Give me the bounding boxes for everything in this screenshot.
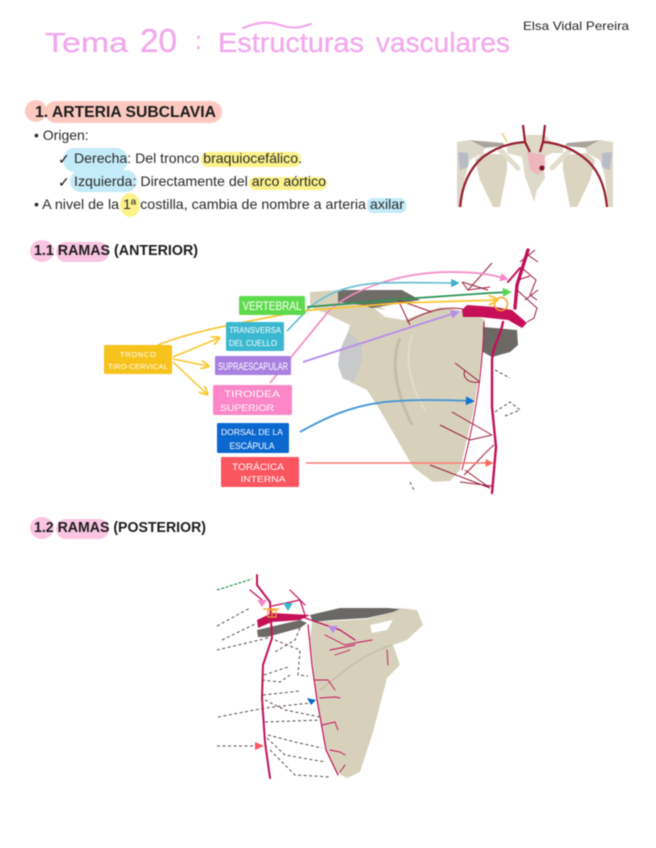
title: : xyxy=(195,28,202,55)
arteries xyxy=(398,250,538,493)
bullet: a nivel de la primera costilla xyxy=(34,193,406,217)
arrow: tronco to supraescapular xyxy=(173,359,208,366)
label: transversa del cuello xyxy=(226,322,284,351)
scapular notch xyxy=(370,620,393,633)
marker: pink xyxy=(257,600,267,607)
label: supraescapular xyxy=(215,356,291,375)
arrow: tronco to transversa xyxy=(173,338,219,357)
label: vertebral xyxy=(239,296,305,315)
label: vertebral: VERTEBRAL xyxy=(242,299,302,313)
title: vasculares xyxy=(376,27,510,58)
section 1 text xyxy=(25,100,406,217)
glenoid xyxy=(338,332,362,382)
bullet: a nivel de la primera costilla: • A nivel de la 1ª costilla, cambia de nombre a arteria axilar xyxy=(34,196,404,212)
main arteries xyxy=(257,575,272,778)
heading: arteria subclavia: 1. ARTERIA SUBCLAVIA xyxy=(35,104,216,121)
subclavian trunk xyxy=(257,613,310,628)
arrow: tiroidea superior xyxy=(270,272,507,383)
heading: arteria subclavia xyxy=(25,100,222,123)
heading: ramas anterior: 1.1 RAMAS (ANTERIOR) xyxy=(34,243,198,259)
scapula body xyxy=(310,608,423,778)
label: toracica interna: TORÁCICA xyxy=(232,462,285,473)
dashed rib vessels xyxy=(262,667,330,777)
subclavian trunk xyxy=(462,305,527,328)
title: Tema xyxy=(45,27,129,58)
label: tiroidea superior xyxy=(213,385,292,415)
right shoulder girdle xyxy=(552,140,613,207)
arrow: tronco to tiroidea xyxy=(173,362,207,394)
author name: Elsa Vidal Pereira xyxy=(523,19,629,33)
scapular branches xyxy=(315,635,388,772)
label: supraescapular: SUPRAESCAPULAR xyxy=(218,361,288,373)
label: toracica interna xyxy=(221,457,299,487)
title: 20 xyxy=(140,22,177,59)
marker: orange box xyxy=(263,609,279,617)
illustration: posterior scapula xyxy=(217,575,423,778)
title xyxy=(45,22,510,59)
heading: ramas posterior xyxy=(30,517,206,539)
item: izquierda: ✓ xyxy=(58,174,70,190)
heading: ramas posterior: 1.2 RAMAS (POSTERIOR) xyxy=(34,520,206,536)
marker: purple xyxy=(328,626,338,633)
arrow: vertebral xyxy=(307,292,510,307)
label: tiroidea superior: SUPERIOR xyxy=(220,403,275,413)
arrow: dorsal de la escapula xyxy=(300,400,473,432)
arrow: transversa del cuello xyxy=(287,283,458,331)
item: derecha: ✓ xyxy=(58,151,70,167)
item: derecha xyxy=(58,148,302,172)
item: derecha: Derecha: Del tronco braquiocefálico. xyxy=(74,150,302,166)
label: tronco tiro-cervical xyxy=(104,345,172,374)
arrow: toracica interna xyxy=(306,462,492,464)
spine and sternum xyxy=(507,135,563,202)
label: transversa del cuello: DEL CUELLO xyxy=(229,339,277,348)
scapula body xyxy=(310,290,485,482)
clavicle xyxy=(310,608,400,622)
label: tiroidea superior: TIROIDEA xyxy=(224,389,280,399)
marker: blue xyxy=(307,698,316,705)
title: Estructuras xyxy=(218,27,364,58)
rib segment xyxy=(257,620,307,637)
arteries xyxy=(460,125,525,207)
label: dorsal de la escapula xyxy=(217,423,289,453)
branch arrows xyxy=(158,272,510,463)
rib segment xyxy=(483,327,518,357)
marker: teal xyxy=(283,603,293,611)
white notch xyxy=(374,308,404,320)
label: tronco tiro-cervical: TRONCO xyxy=(120,350,156,359)
arrow: supraescapular xyxy=(303,312,458,362)
clavicle xyxy=(338,290,420,308)
label: dorsal de la escapula: ESCÁPULA xyxy=(230,441,275,452)
item: izquierda: Izquierda: Directamente del arco aórtico xyxy=(74,173,326,189)
illustration: anterior scapula xyxy=(310,250,538,493)
illustration: thorax overview xyxy=(457,125,613,207)
marker: red xyxy=(255,742,264,750)
label: transversa del cuello: TRANSVERSA xyxy=(229,326,282,335)
label: dorsal de la escapula: DORSAL DE LA xyxy=(221,427,283,437)
label: toracica interna: INTERNA xyxy=(240,474,286,484)
left shoulder girdle xyxy=(457,140,518,207)
bullet: origen: • Origen: xyxy=(34,127,89,143)
label: tronco tiro-cervical: TIRO-CERVICAL xyxy=(108,362,168,371)
item: izquierda xyxy=(58,170,327,192)
arrow: tronco to far vessel xyxy=(158,300,497,345)
orange marker ring xyxy=(494,298,508,310)
green dashed line xyxy=(217,579,252,590)
